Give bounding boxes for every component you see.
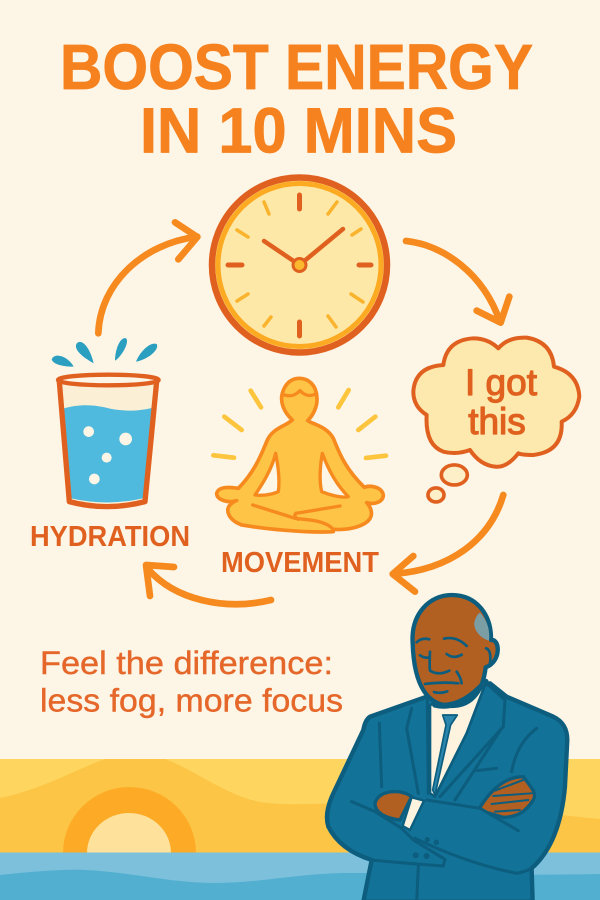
background: sunset beach scene bbox=[0, 759, 600, 900]
crossed forearm bbox=[414, 800, 537, 873]
left hand bbox=[375, 792, 412, 820]
lapels and jacket seams bbox=[379, 685, 537, 800]
thought bubble bbox=[413, 338, 579, 502]
thought bubble text bbox=[465, 362, 538, 442]
shirt cuff bbox=[403, 797, 424, 830]
caption: less fog, more focus bbox=[40, 682, 343, 718]
head and ear bbox=[413, 595, 498, 706]
arrow: thought bubble to movement bbox=[393, 495, 503, 592]
arrow: movement to hydration bbox=[146, 565, 271, 604]
arrow: clock to thought bubble bbox=[406, 241, 509, 323]
neck shadow bbox=[435, 682, 486, 706]
crossed legs and hairline bbox=[253, 391, 340, 529]
thought bubble text: I got bbox=[465, 362, 538, 403]
sleeve buttons bbox=[413, 837, 439, 859]
tie bbox=[433, 715, 457, 795]
icon: water glass bbox=[52, 338, 159, 507]
icon: meditating figure bbox=[213, 378, 386, 532]
title: BOOST ENERGY bbox=[60, 31, 533, 103]
energy rays bbox=[213, 390, 386, 458]
caption: Feel the difference: bbox=[40, 645, 333, 681]
right hand bbox=[478, 777, 535, 817]
label: movement: MOVEMENT bbox=[221, 547, 379, 579]
title: IN 10 MINS bbox=[140, 94, 457, 166]
illustration: man in blue suit, eyes closed, arms crossed bbox=[327, 595, 567, 900]
caption bbox=[40, 645, 343, 718]
grey hair bbox=[474, 613, 489, 641]
arm gaps bbox=[255, 453, 279, 495]
label: hydration: HYDRATION bbox=[30, 521, 190, 553]
body silhouette bbox=[217, 378, 383, 532]
arrow: hydration to clock bbox=[98, 222, 197, 333]
water splash drops bbox=[52, 338, 157, 367]
thought bubble text: this bbox=[468, 401, 526, 442]
title bbox=[60, 31, 533, 166]
icon: clock bbox=[212, 178, 387, 352]
shirt bbox=[430, 685, 485, 797]
face details bbox=[417, 638, 490, 693]
jacket bbox=[327, 683, 567, 900]
